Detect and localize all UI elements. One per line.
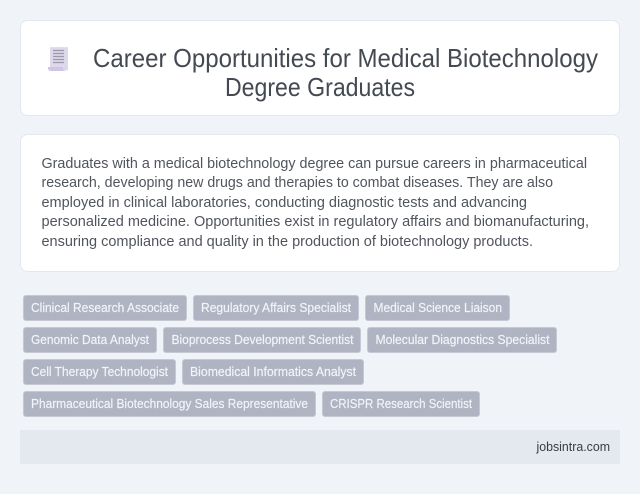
footer: jobsintra.com — [536, 439, 610, 454]
tag — [366, 296, 510, 320]
tag: Clinical Research Associate — [31, 300, 179, 315]
icon: document scroll — [48, 47, 68, 71]
tag — [194, 296, 358, 320]
title — [93, 43, 598, 102]
panel: description — [20, 134, 620, 272]
footer — [20, 430, 620, 464]
panel: title card — [20, 20, 620, 116]
tag: Regulatory Affairs Specialist — [201, 300, 351, 315]
tag: Molecular Diagnostics Specialist — [376, 332, 550, 347]
text block: description: research, developing new drugs and therapies to combat diseases. They are also — [42, 174, 553, 191]
tag — [24, 328, 156, 352]
tag — [24, 392, 316, 416]
title: Degree Graduates — [225, 72, 415, 102]
text block: description: ensuring compliance and quality in the production of biotechnology products. — [42, 233, 533, 250]
tag: Genomic Data Analyst — [31, 332, 149, 347]
tag — [24, 360, 176, 384]
tag: Biomedical Informatics Analyst — [190, 364, 356, 379]
text block: description: personalized medicine. Opportunities exist in regulatory affairs and biomanufacturing, — [42, 213, 589, 230]
tag — [368, 328, 556, 352]
text block: description: Graduates with a medical biotechnology degree can pursue careers in pharmaceutical — [42, 155, 587, 172]
tag: Bioprocess Development Scientist — [172, 332, 354, 347]
tag: Cell Therapy Technologist — [31, 364, 168, 379]
text block: description — [42, 155, 589, 250]
tag: Pharmaceutical Biotechnology Sales Representative — [31, 396, 308, 411]
tag — [24, 296, 186, 320]
tag — [182, 360, 364, 384]
tag: Medical Science Liaison — [374, 300, 502, 315]
title: Career Opportunities for Medical Biotechnology — [93, 43, 598, 73]
tags: related careers — [24, 296, 556, 416]
tag: CRISPR Research Scientist — [330, 396, 472, 411]
text block: description: employed in clinical laboratories, conducting diagnostic tests and advancing — [42, 194, 527, 211]
tag — [322, 392, 480, 416]
tag — [164, 328, 360, 352]
